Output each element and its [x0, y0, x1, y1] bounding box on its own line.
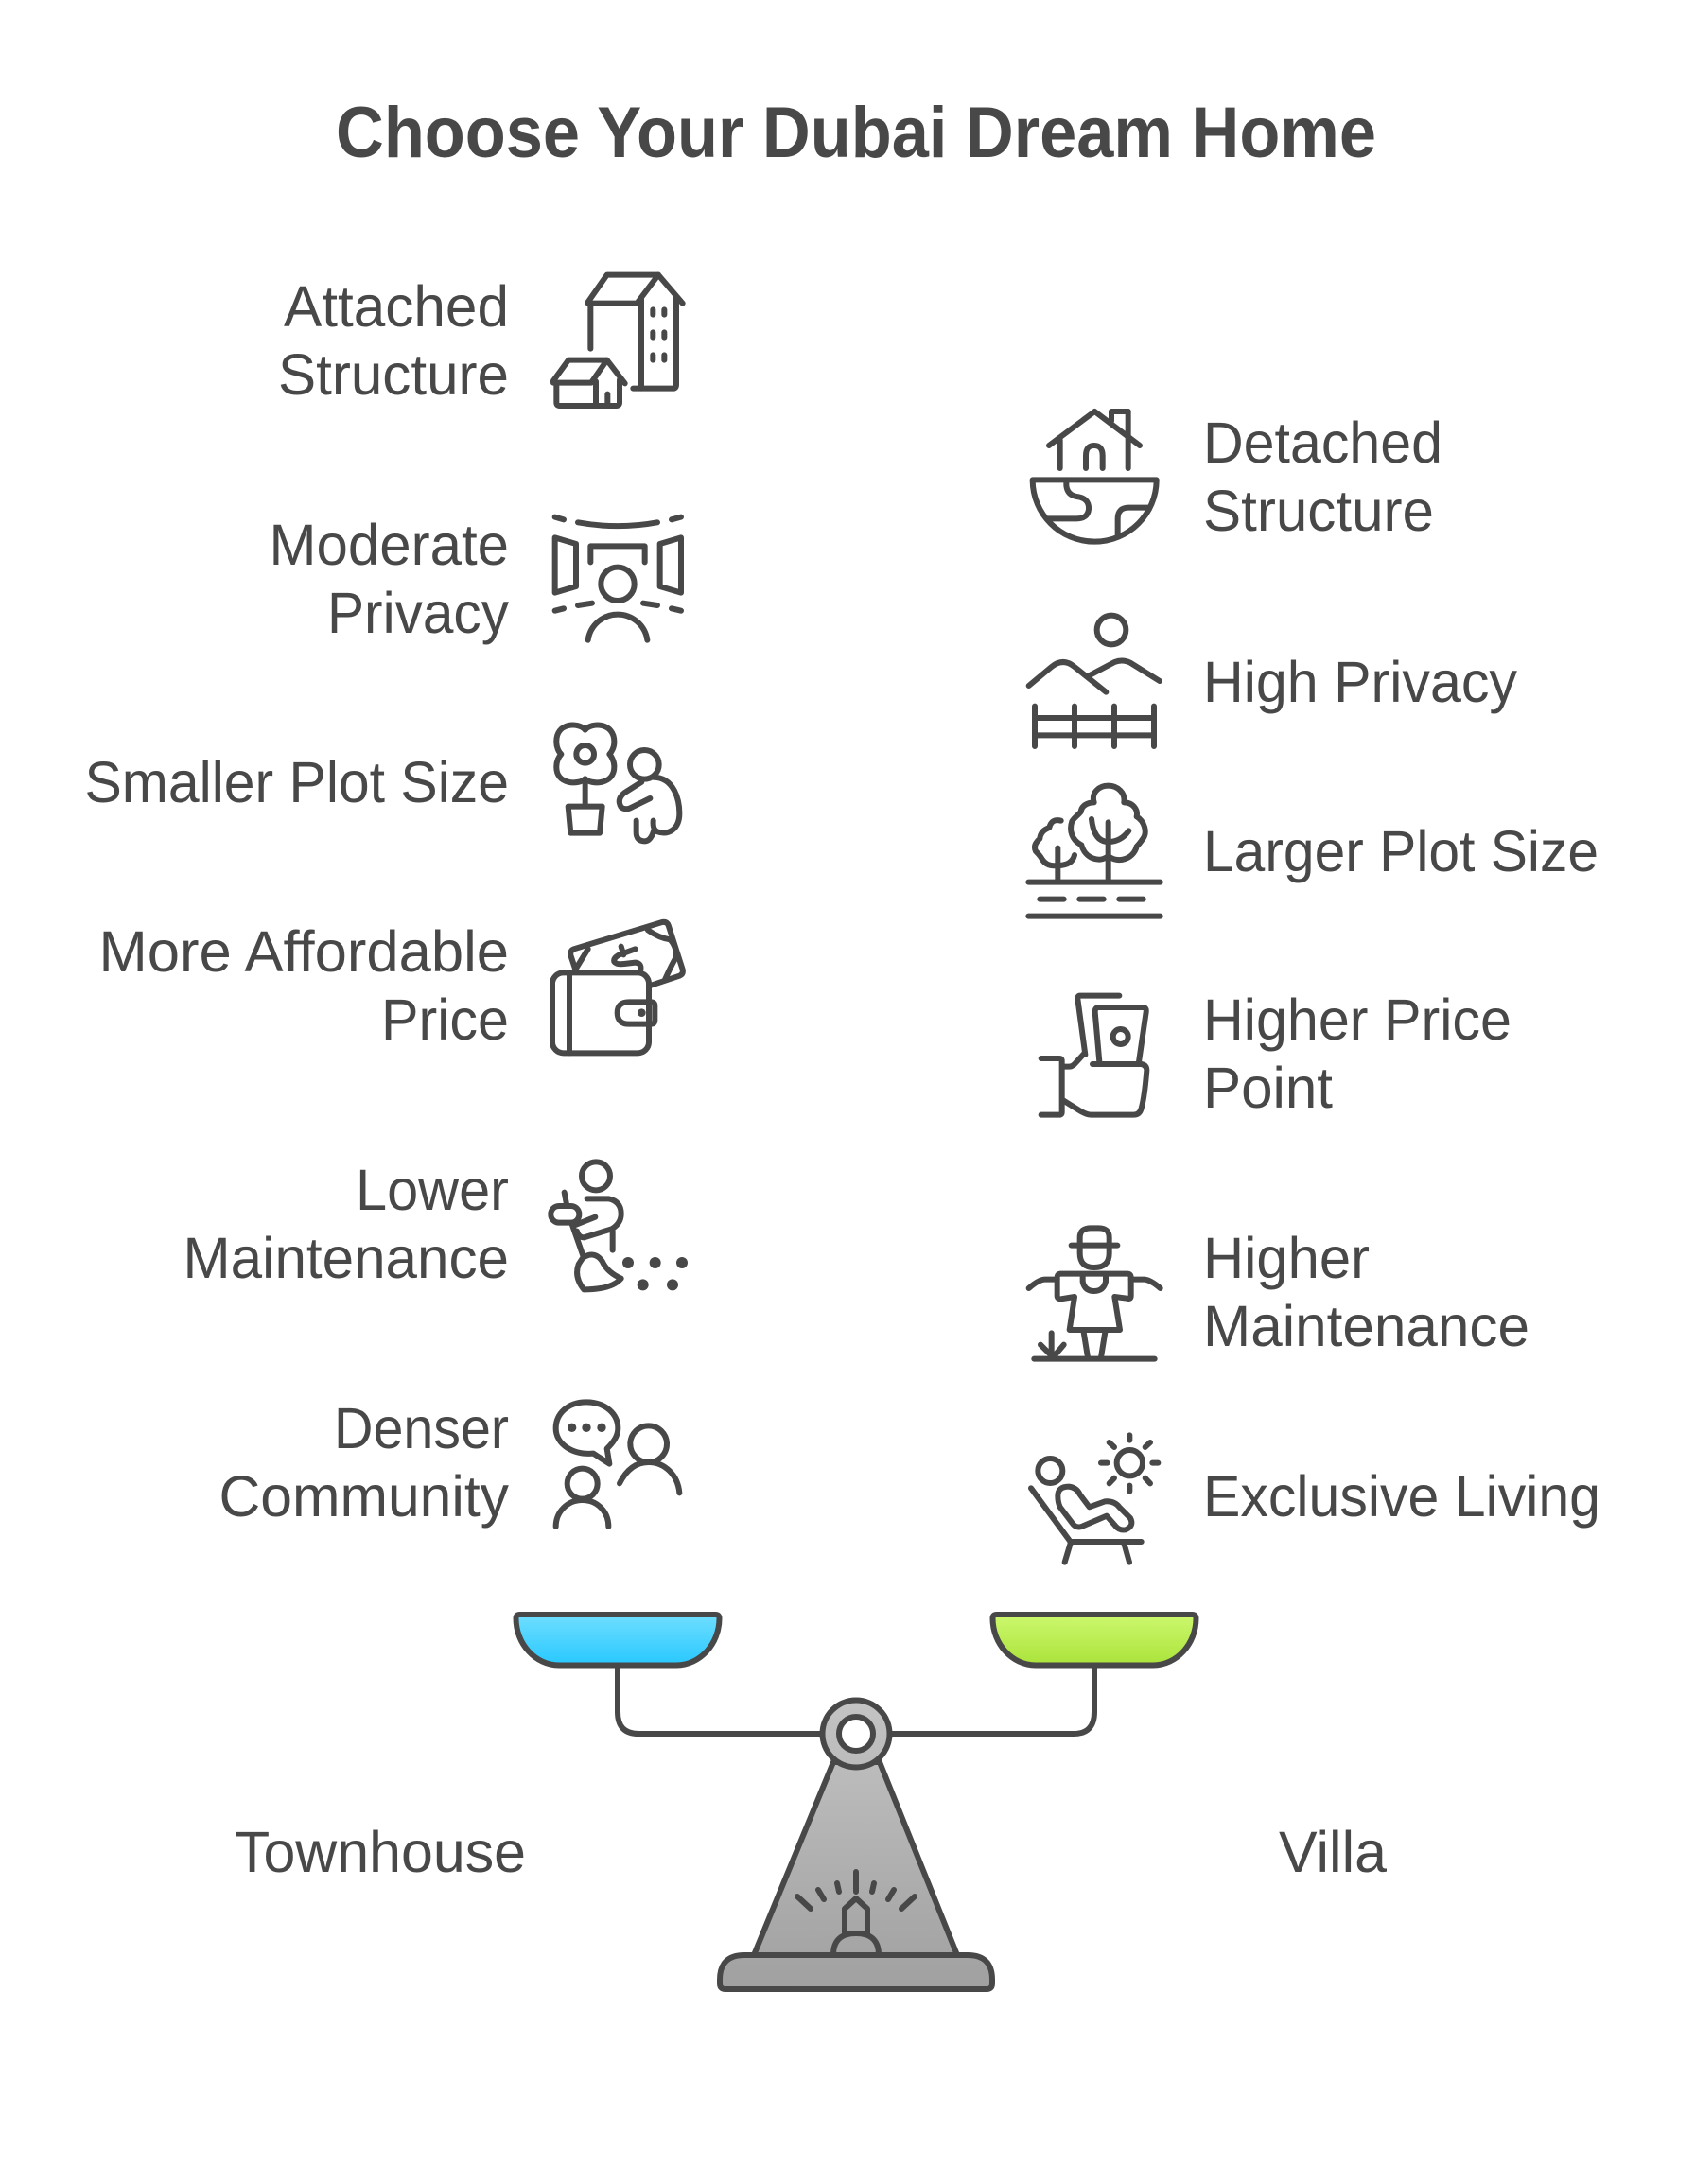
icon: attached buildings [553, 275, 683, 406]
chart: balance scale [516, 1615, 1196, 1989]
stand [754, 1762, 957, 1955]
panel: townhouse column [85, 274, 688, 1529]
beam [618, 1668, 1094, 1734]
label: attached structure [278, 274, 509, 407]
label: higher maintenance: Higher [1203, 1226, 1370, 1290]
label: moderate privacy [269, 513, 509, 645]
label: townhouse: Townhouse [235, 1820, 526, 1884]
icon: person framed by panels [555, 517, 681, 640]
gauge on stand [797, 1872, 915, 1955]
label: denser community: Denser [334, 1396, 509, 1460]
label: moderate privacy: Privacy [327, 581, 509, 645]
panel: villa column [1028, 411, 1600, 1563]
icon: wallet with banknote [552, 922, 683, 1053]
label: higher maintenance: Maintenance [1203, 1294, 1529, 1358]
label: attached structure: Attached [284, 274, 509, 339]
label: higher price point: Point [1203, 1056, 1333, 1120]
label: detached structure: Structure [1203, 479, 1434, 543]
label: detached structure [1203, 411, 1442, 543]
icon: person on lounger with sun [1031, 1435, 1158, 1563]
label: larger plot size: Larger Plot Size [1203, 819, 1599, 883]
left pan: townhouse [516, 1615, 719, 1665]
icon: hand holding money [1041, 996, 1146, 1115]
right pan: villa [993, 1615, 1196, 1665]
label: lower maintenance: Maintenance [183, 1226, 509, 1290]
label: detached structure: Detached [1203, 411, 1442, 475]
label: lower maintenance [183, 1158, 509, 1290]
label: attached structure: Structure [278, 342, 509, 407]
icon: detached house on globe [1033, 411, 1157, 542]
base [720, 1955, 992, 1989]
label: more affordable price: More Affordable [98, 919, 509, 984]
label: denser community: Community [219, 1464, 509, 1529]
label: higher price point [1203, 987, 1512, 1120]
icon: person sweeping [550, 1162, 688, 1290]
icon: scarecrow [1029, 1228, 1161, 1359]
label: moderate privacy: Moderate [269, 513, 509, 577]
label: smaller plot size: Smaller Plot Size [85, 750, 509, 814]
icon: people talking [556, 1402, 679, 1527]
label: higher maintenance [1203, 1226, 1529, 1358]
label: higher price point: Higher Price [1203, 987, 1512, 1052]
icon: potted flower and person [556, 725, 679, 841]
icon: trees on plot [1028, 786, 1161, 917]
label: high privacy: High Privacy [1203, 650, 1517, 714]
hub [823, 1701, 889, 1767]
label: more affordable price [98, 919, 509, 1052]
label: lower maintenance: Lower [356, 1158, 509, 1222]
label: exclusive living: Exclusive Living [1203, 1464, 1600, 1529]
icon: hills and fence [1029, 616, 1160, 746]
label: denser community [219, 1396, 509, 1529]
label: villa: Villa [1279, 1820, 1387, 1884]
label: more affordable price: Price [381, 987, 509, 1052]
title: Choose Your Dubai Dream Home [336, 93, 1376, 173]
